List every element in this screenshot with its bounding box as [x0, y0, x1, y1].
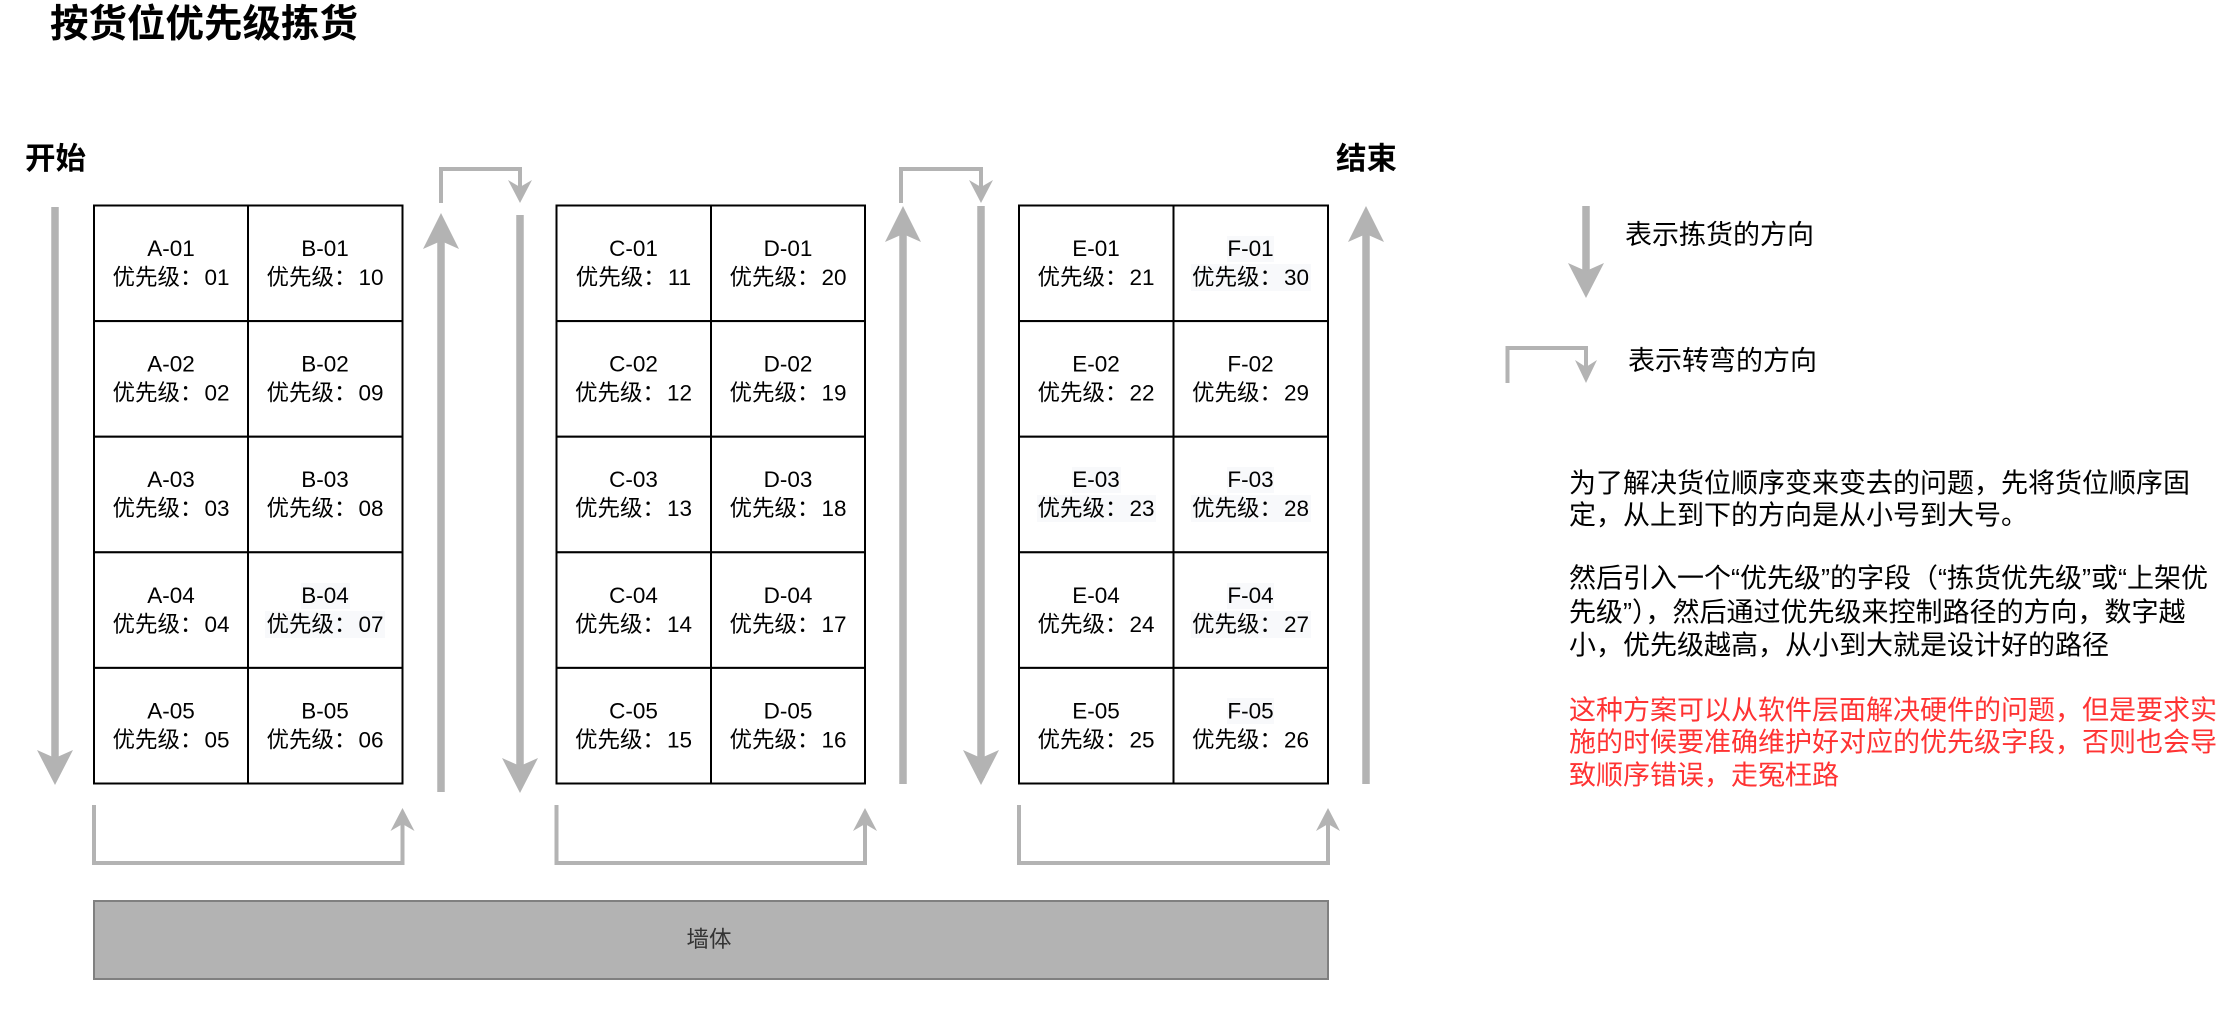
- shelf cell F-03: [1174, 437, 1328, 552]
- shelf cell B-02: 优先级： 09: [266, 381, 384, 406]
- legend: picking direction: 表示拣货的方向: [1625, 220, 1814, 250]
- shelf cell C-05: 优先级： 15: [575, 727, 692, 752]
- shelf cell C-02: C-02: [609, 352, 658, 377]
- shelf cell D-01: 优先级： 20: [729, 265, 847, 290]
- warning text in red: 施的时候要准确维护好对应的优先级字段，否则也会导: [1569, 728, 2217, 758]
- shelf cell D-03: [711, 437, 865, 552]
- shelf cell D-02: [711, 321, 865, 437]
- turn arrow: top 2: [901, 169, 993, 203]
- shelf cell A-01: A-01: [147, 236, 195, 261]
- shelf cell D-05: [711, 668, 865, 784]
- shelf cell B-05: 优先级： 06: [266, 727, 384, 752]
- shelf cell E-05: E-05: [1072, 698, 1120, 723]
- shelf cell E-01: 优先级： 21: [1037, 265, 1155, 290]
- turn arrow: bottom 3: [1019, 805, 1340, 863]
- shelf cell A-04: [94, 552, 248, 668]
- warning text in red: 这种方案可以从软件层面解决硬件的问题，但是要求实: [1569, 696, 2217, 726]
- explanation text: 先级”），然后通过优先级来控制路径的方向，数字越: [1569, 598, 2186, 628]
- shelf cell F-02: 优先级： 29: [1192, 381, 1309, 406]
- shelf cell A-05: 优先级： 05: [112, 727, 230, 752]
- shelf cell E-01: [1019, 206, 1174, 321]
- shelf cell F-04: F-04: [1227, 583, 1274, 608]
- shelf cell C-03: 优先级： 13: [575, 496, 692, 521]
- shelf cell A-05: [94, 668, 248, 784]
- shelf cell E-03: 优先级： 23: [1037, 496, 1155, 521]
- shelf cell B-03: [248, 437, 402, 552]
- shelf cell D-04: 优先级： 17: [729, 612, 847, 637]
- turn arrow: bottom 2: [556, 805, 877, 863]
- shelf cell B-05: [248, 668, 402, 784]
- shelf group: A and B: [94, 206, 402, 784]
- warning text in red: [1569, 696, 2217, 790]
- shelf cell E-04: 优先级： 24: [1037, 612, 1155, 637]
- shelf cell F-01: F-01: [1227, 236, 1274, 261]
- shelf cell B-03: 优先级： 08: [266, 496, 384, 521]
- shelf cell E-05: [1019, 668, 1174, 784]
- shelf cell D-03: D-03: [764, 467, 812, 492]
- shelf cell F-04: 优先级： 27: [1192, 612, 1309, 637]
- shelf cell B-02: [248, 321, 402, 437]
- wall: [94, 901, 1328, 979]
- shelf cell D-04: D-04: [764, 583, 812, 608]
- shelf cell B-04: B-04: [301, 583, 349, 608]
- arrow: up aisle 1: [423, 213, 459, 792]
- arrow: start picking down: [37, 207, 73, 785]
- shelf cell C-01: C-01: [609, 236, 658, 261]
- shelf cell D-02: D-02: [764, 352, 812, 377]
- explanation text: [1569, 468, 2208, 660]
- shelf cell E-03: [1019, 437, 1174, 552]
- shelf cell B-01: B-01: [301, 236, 349, 261]
- shelf cell F-02: [1174, 321, 1328, 437]
- shelf cell F-05: F-05: [1227, 698, 1274, 723]
- shelf cell A-04: A-04: [147, 583, 195, 608]
- shelf cell A-01: [94, 206, 248, 321]
- shelf cell E-02: 优先级： 22: [1037, 381, 1155, 406]
- shelf cell D-03: 优先级： 18: [729, 496, 847, 521]
- shelf cell C-01: 优先级： 11: [576, 265, 691, 290]
- legend: turn direction: 表示转弯的方向: [1628, 346, 1817, 376]
- shelf cell E-04: [1019, 552, 1174, 668]
- shelf cell A-02: [94, 321, 248, 437]
- warning text in red: 致顺序错误，走冤枉路: [1569, 760, 1839, 790]
- shelf cell E-05: 优先级： 25: [1037, 727, 1155, 752]
- shelf cell A-03: [94, 437, 248, 552]
- shelf cell B-01: [248, 206, 402, 321]
- arrow: up aisle 2: [885, 206, 921, 784]
- shelf cell C-02: [556, 321, 711, 437]
- explanation text: 然后引入一个“优先级”的字段（“拣货优先级”或“上架优: [1569, 564, 2208, 594]
- explanation text: 小，优先级越高，从小到大就是设计好的路径: [1569, 630, 2109, 660]
- shelf cell C-05: [556, 668, 711, 784]
- shelf cell A-03: A-03: [147, 467, 195, 492]
- shelf cell E-01: E-01: [1072, 236, 1120, 261]
- shelf cell A-05: A-05: [147, 698, 195, 723]
- shelf cell C-04: C-04: [609, 583, 658, 608]
- shelf cell D-04: [711, 552, 865, 668]
- shelf cell F-01: 优先级： 30: [1192, 265, 1309, 290]
- arrow: down aisle 2: [963, 206, 999, 785]
- shelf cell C-03: C-03: [609, 467, 658, 492]
- title: 按货位优先级拣货: [50, 3, 358, 46]
- shelf cell E-02: E-02: [1072, 352, 1120, 377]
- turn arrow: top 1: [441, 169, 532, 203]
- label: start: 开始: [25, 142, 86, 176]
- shelf cell A-02: A-02: [147, 352, 195, 377]
- shelf cell E-02: [1019, 321, 1174, 437]
- shelf cell D-05: D-05: [764, 698, 812, 723]
- shelf group: C and D: [556, 206, 865, 784]
- shelf cell A-04: 优先级： 04: [112, 612, 230, 637]
- shelf group: E and F: [1019, 206, 1328, 784]
- shelf cell C-04: 优先级： 14: [575, 612, 692, 637]
- shelf cell F-05: 优先级： 26: [1192, 727, 1309, 752]
- shelf cell C-04: [556, 552, 711, 668]
- shelf cell B-03: B-03: [301, 467, 349, 492]
- shelf cell E-04: E-04: [1072, 583, 1120, 608]
- shelf cell D-02: 优先级： 19: [729, 381, 847, 406]
- shelf cell C-01: [556, 206, 711, 321]
- legend: turn direction: [1508, 346, 1817, 383]
- shelf cell B-02: B-02: [301, 352, 349, 377]
- shelf cell A-01: 优先级： 01: [112, 265, 230, 290]
- shelf cell F-03: F-03: [1227, 467, 1274, 492]
- shelf cell B-05: B-05: [301, 698, 349, 723]
- turn arrow: bottom 1: [94, 805, 414, 863]
- shelf cell D-01: [711, 206, 865, 321]
- shelf cell C-05: C-05: [609, 698, 658, 723]
- shelf cell D-05: 优先级： 16: [729, 727, 847, 752]
- shelf cell A-03: 优先级： 03: [112, 496, 230, 521]
- arrow: up to end: [1348, 206, 1384, 784]
- shelf cell C-03: [556, 437, 711, 552]
- arrow: down aisle 1: [502, 215, 538, 793]
- shelf cell F-01: [1174, 206, 1328, 321]
- shelf cell F-04: [1174, 552, 1328, 668]
- shelf cell B-01: 优先级： 10: [266, 265, 384, 290]
- shelf cell E-03: E-03: [1072, 467, 1120, 492]
- label: end: 结束: [1336, 142, 1397, 176]
- shelf cell C-02: 优先级： 12: [575, 381, 692, 406]
- shelf cell F-02: F-02: [1227, 352, 1274, 377]
- wall: 墙体: [686, 927, 732, 952]
- shelf cell A-02: 优先级： 02: [112, 381, 230, 406]
- shelf cell D-01: D-01: [764, 236, 812, 261]
- shelf cell B-04: 优先级： 07: [266, 612, 384, 637]
- shelf cell F-03: 优先级： 28: [1192, 496, 1309, 521]
- legend: picking direction: [1568, 206, 1814, 298]
- shelf cell F-05: [1174, 668, 1328, 784]
- explanation text: 定，从上到下的方向是从小号到大号。: [1569, 500, 2028, 530]
- explanation text: 为了解决货位顺序变来变去的问题，先将货位顺序固: [1569, 468, 2190, 498]
- shelf cell B-04: [248, 552, 402, 668]
